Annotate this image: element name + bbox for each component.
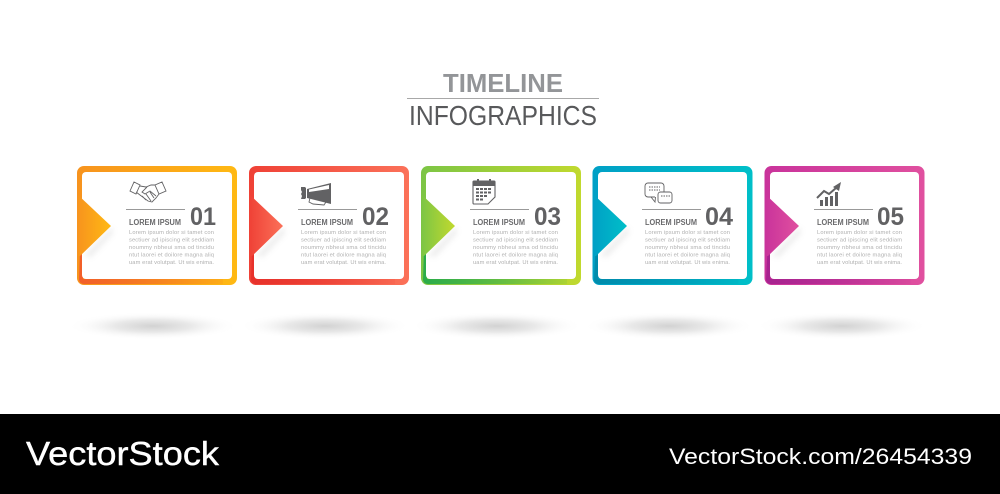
panel: step 03: noummy nbheui sma od tincidu <box>473 245 558 251</box>
panel: step 02: ntut laorei et doilore magna aliq <box>301 252 386 258</box>
panel: step 01: noummy nbheui sma od tincidu <box>129 245 214 251</box>
panel: step 02: noummy nbheui sma od tincidu <box>301 245 386 251</box>
footer bar <box>0 414 1000 494</box>
panel: step 01: LOREM IPSUM <box>129 217 181 227</box>
panel: step 01: Lorem ipsum dolor si tamet con <box>129 230 214 236</box>
icon: calendar <box>473 179 495 204</box>
panel: step 01: sectiuer ad ipiscing elit seddiam <box>129 238 214 244</box>
panel: step 05: LOREM IPSUM <box>817 217 869 227</box>
panel: step 05: ntut laorei et doilore magna aliq <box>817 252 902 258</box>
icon: megaphone <box>301 183 331 205</box>
panel: step 02 <box>239 166 411 340</box>
panel: step 05: sectiuer ad ipiscing elit seddiam <box>817 238 902 244</box>
title: INFOGRAPHICS <box>409 100 597 131</box>
panel: step 04: 04 <box>705 203 733 231</box>
icon: handshake <box>130 182 166 202</box>
panel: step 05: noummy nbheui sma od tincidu <box>817 245 902 251</box>
title <box>407 68 599 131</box>
panel: step 02: sectiuer ad ipiscing elit seddiam <box>301 238 386 244</box>
panel: step 05 <box>756 166 928 340</box>
icon: chat bubbles <box>645 183 672 203</box>
panel: step 01: 01 <box>190 203 216 231</box>
panel: step 04 <box>583 166 755 340</box>
panel: step 02: Lorem ipsum dolor si tamet con <box>301 230 386 236</box>
panel: step 03: ntut laorei et doilore magna aliq <box>473 252 558 258</box>
panel: step 02: uam erat volutpat. Ut wis enima. <box>301 260 386 266</box>
panel: step 05: uam erat volutpat. Ut wis enima. <box>817 260 902 266</box>
panel: step 01: uam erat volutpat. Ut wis enima. <box>129 260 214 266</box>
panel: step 02: LOREM IPSUM <box>301 217 353 227</box>
footer logo: VectorStock <box>26 436 219 473</box>
footer url: VectorStock.com/26454339 <box>669 444 972 469</box>
panel: step 03: 03 <box>534 203 561 231</box>
panel: step 04: Lorem ipsum dolor si tamet con <box>645 230 730 236</box>
panel: step 03: LOREM IPSUM <box>473 217 525 227</box>
panel: step 03: Lorem ipsum dolor si tamet con <box>473 230 558 236</box>
panel: step 05: Lorem ipsum dolor si tamet con <box>817 230 902 236</box>
panel: step 04: LOREM IPSUM <box>645 217 697 227</box>
icon: growth chart <box>817 182 841 206</box>
panel: step 03: uam erat volutpat. Ut wis enima. <box>473 260 558 266</box>
title: TIMELINE <box>443 68 563 98</box>
panel: step 04: noummy nbheui sma od tincidu <box>645 245 730 251</box>
panel: step 01 <box>67 166 239 340</box>
panel: step 04: ntut laorei et doilore magna aliq <box>645 252 730 258</box>
panel: step 01: ntut laorei et doilore magna aliq <box>129 252 214 258</box>
panel: step 04: sectiuer ad ipiscing elit seddiam <box>645 238 730 244</box>
panel: step 03 <box>411 166 583 340</box>
panel: step 04: uam erat volutpat. Ut wis enima. <box>645 260 730 266</box>
panel: step 02: 02 <box>362 203 389 231</box>
panel: step 05: 05 <box>877 203 904 231</box>
panel: step 03: sectiuer ad ipiscing elit seddiam <box>473 238 558 244</box>
